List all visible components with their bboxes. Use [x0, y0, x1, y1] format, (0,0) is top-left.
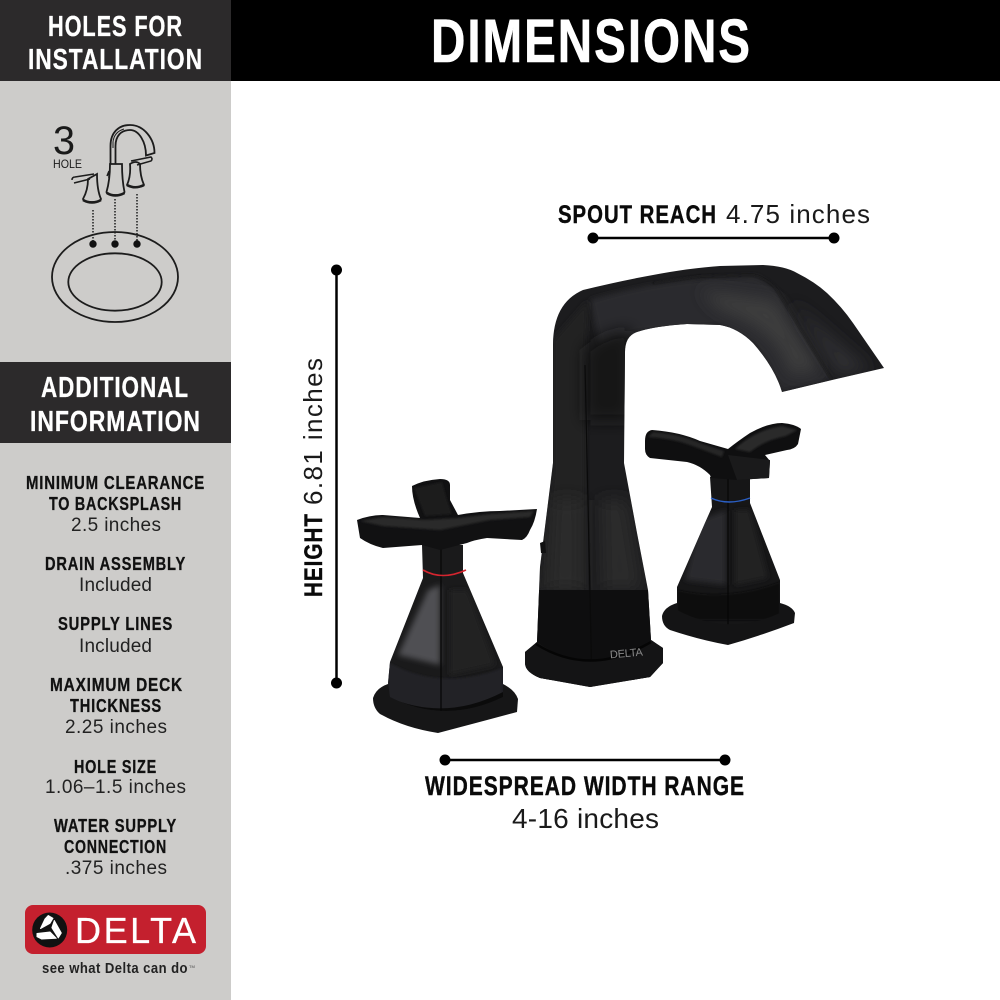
title: dimensions: DIMENSIONS — [431, 7, 752, 75]
spec: maximum deck thickness: MAXIMUM DECK — [50, 674, 183, 695]
spec: minimum clearance: 2.5 inches — [71, 515, 161, 536]
header band: additional information: ADDITIONAL — [41, 372, 189, 404]
spec: water supply connection: .375 inches — [65, 858, 167, 879]
dimension: spout reach — [558, 199, 870, 244]
faucet: right cross handle — [645, 423, 801, 645]
header band: holes for installation: INSTALLATION — [28, 44, 203, 76]
faucet: centre spout body: DELTA — [609, 646, 644, 661]
icon: 3 hole faucet and sink diagram: 3 — [53, 119, 75, 163]
spec: water supply connection: CONNECTION — [64, 836, 167, 857]
spec: supply lines: SUPPLY LINES — [58, 613, 173, 634]
dimension: spout reach: 4.75 inches — [726, 199, 870, 229]
spec: hole size: HOLE SIZE — [74, 756, 157, 777]
header band: additional information — [0, 362, 231, 443]
header band: holes for installation — [0, 0, 231, 81]
logo: delta: TM — [189, 964, 195, 969]
spec: minimum clearance: MINIMUM CLEARANCE — [26, 472, 205, 493]
header band: holes for installation: HOLES FOR — [48, 11, 183, 43]
logo: delta — [25, 905, 206, 977]
spec: water supply connection — [54, 815, 177, 879]
icon: 3 hole faucet and sink diagram: HOLE — [53, 157, 82, 171]
header band: additional information: INFORMATION — [30, 406, 201, 438]
sidebar background — [0, 81, 231, 1000]
title: dimensions — [231, 0, 1000, 81]
faucet: left cross handle — [357, 479, 537, 733]
dimension: height: HEIGHT — [300, 513, 328, 597]
dimension: widespread width range: WIDESPREAD WIDTH RANGE — [425, 771, 745, 801]
spec: minimum clearance — [26, 472, 205, 536]
dimension: height — [298, 264, 342, 688]
dimension: spout reach: SPOUT REACH — [558, 201, 717, 229]
dimension: height: 6.81 inches — [298, 358, 328, 505]
spec: minimum clearance: TO BACKSPLASH — [49, 493, 182, 514]
faucet: centre spout body — [520, 265, 884, 690]
spec: supply lines: Included — [79, 636, 152, 657]
spec: drain assembly: Included — [79, 575, 152, 596]
dimension: widespread width range: 4-16 inches — [512, 803, 659, 834]
dimension: widespread width range — [425, 754, 745, 834]
spec: supply lines — [58, 613, 173, 657]
spec: maximum deck thickness — [50, 674, 183, 738]
spec: drain assembly: DRAIN ASSEMBLY — [45, 553, 186, 574]
logo: delta: DELTA — [75, 910, 196, 951]
icon: 3 hole faucet and sink diagram — [52, 119, 178, 322]
spec: drain assembly — [45, 553, 186, 596]
logo: delta: see what Delta can do — [42, 961, 188, 977]
spec: hole size: 1.06–1.5 inches — [45, 777, 186, 798]
spec: hole size — [45, 756, 186, 798]
spec: maximum deck thickness: THICKNESS — [70, 695, 162, 716]
spec: maximum deck thickness: 2.25 inches — [65, 717, 167, 738]
spec: water supply connection: WATER SUPPLY — [54, 815, 177, 836]
